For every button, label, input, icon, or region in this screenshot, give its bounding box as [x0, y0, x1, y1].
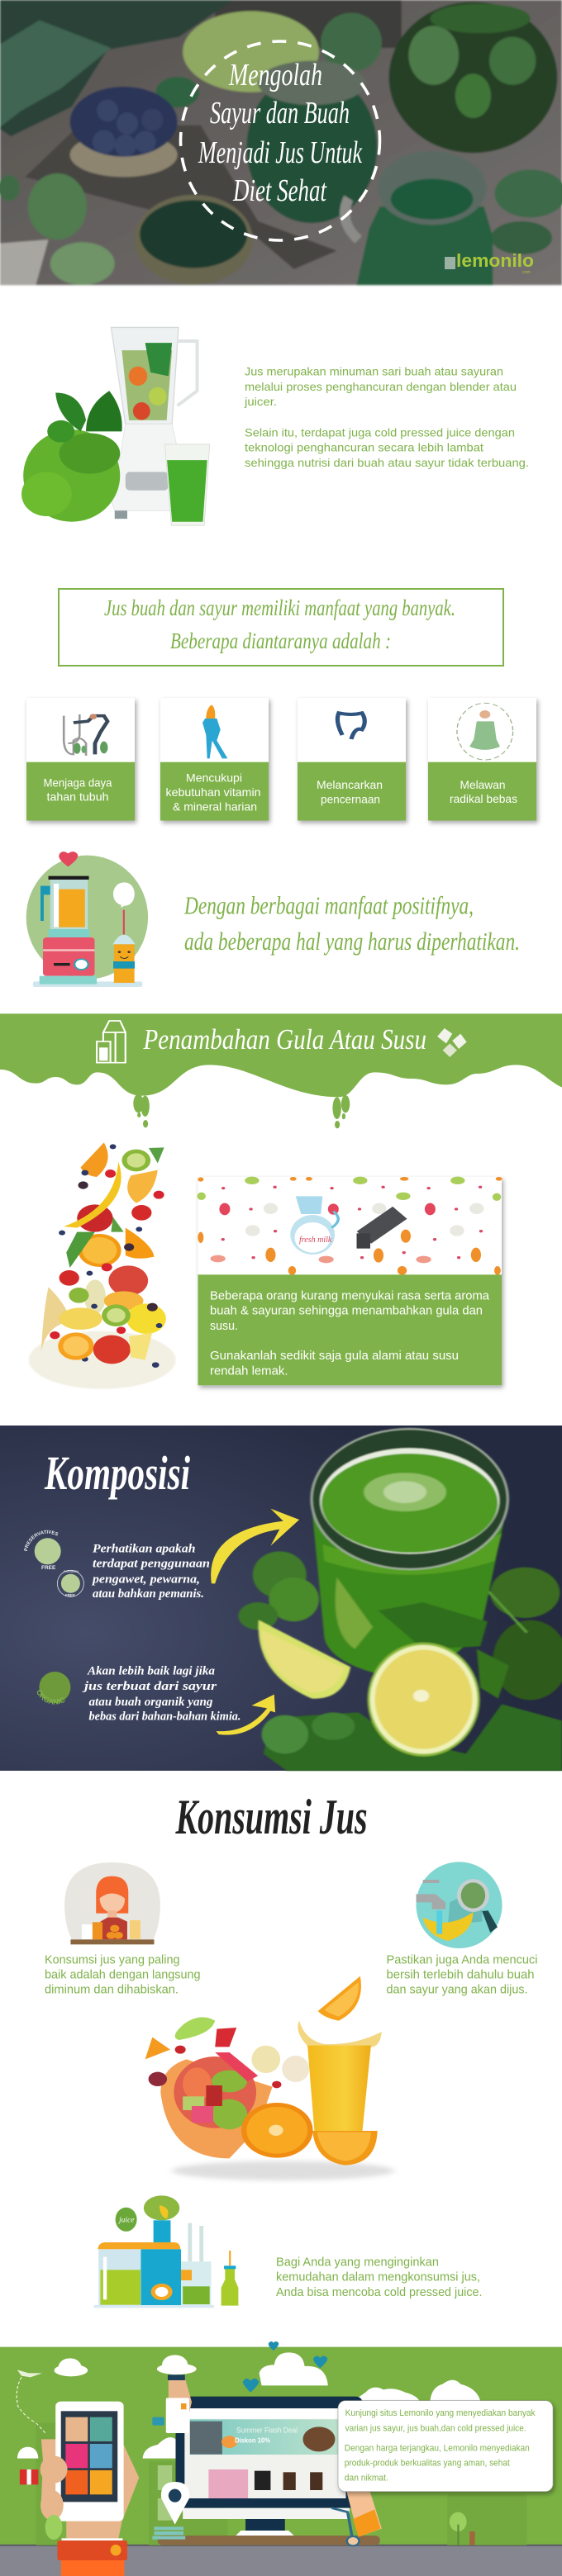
illustration: juice blender and cup	[26, 852, 148, 987]
logo: lemonilo: lemonilo	[456, 250, 534, 271]
icon: heart	[59, 852, 78, 866]
illustration: delivery box courier	[331, 2483, 382, 2545]
panel: benefit cards	[26, 698, 536, 821]
monitor promo text: Diskon 10%	[235, 2436, 270, 2444]
card: radikal bebas	[428, 698, 536, 821]
blender base	[111, 424, 179, 510]
illustration: juicer machine	[94, 2195, 238, 2308]
plane and parachute	[17, 2370, 46, 2484]
icon: fresh milk jug: fresh milk	[299, 1236, 332, 1245]
card: pencernaan: pencernaan	[321, 793, 380, 806]
text: organic: atau buah organik yang	[89, 1696, 213, 1709]
text: preservatives: terdapat penggunaan	[93, 1558, 210, 1571]
card: radikal bebas: Melawan	[460, 778, 506, 791]
note text	[183, 891, 520, 956]
illustration: hand with card	[152, 2364, 197, 2433]
text: wash first: bersih terlebih dahulu buah	[387, 1968, 534, 1981]
text: preservatives	[91, 1542, 210, 1601]
text: organic: Akan lebih baik lagi jika	[87, 1665, 215, 1678]
monitor	[158, 2397, 380, 2545]
icon: body silhouette	[202, 704, 227, 758]
hero photo	[0, 0, 562, 285]
badge: preservatives free: FREE	[41, 1565, 56, 1571]
icon: meditation	[457, 703, 513, 760]
text: organic: jus terbuat dari sayur	[83, 1680, 217, 1693]
scene background	[0, 2347, 562, 2576]
text: wash first: dan sayur yang akan dijus.	[387, 1983, 527, 1996]
monitor promo text: Summer Flash Deal	[236, 2427, 298, 2435]
card: daya tahan tubuh: Menjaga daya	[43, 776, 112, 790]
intro text: teknologi penghancuran secara lebih lambat	[245, 441, 483, 454]
icon: stethoscope and yoga	[64, 714, 108, 756]
note text: Gunakanlah sedikit saja gula alami atau susu	[210, 1350, 459, 1363]
logo: lemonilo	[445, 250, 534, 275]
hero title: Menjadi Jus Untuk	[198, 135, 363, 170]
heading: Komposisi	[44, 1446, 190, 1500]
callout: visit lemonilo: Kunjungi situs Lemonilo yang menyediakan banyak	[345, 2408, 536, 2418]
text: consume directly: Konsumsi jus yang paling	[45, 1953, 180, 1966]
icon: sugar pack	[357, 1207, 407, 1249]
note text	[210, 1289, 490, 1378]
arrow: to lime	[217, 1695, 275, 1735]
callout: visit lemonilo	[338, 2401, 553, 2492]
intro text: sehingga nutrisi dari buah atau sayur tidak terbuang.	[245, 456, 529, 469]
text: preservatives: pengawet, pewarna,	[91, 1573, 200, 1587]
drips	[133, 1094, 350, 1128]
photo: green juice glass with lime	[0, 1426, 562, 1771]
callout box: benefits heading: Beberapa diantaranya adalah :	[170, 629, 391, 653]
note text: susu.	[210, 1320, 238, 1333]
note text: rendah lemak.	[210, 1364, 288, 1378]
callout: visit lemonilo: dan nikmat.	[345, 2473, 388, 2483]
glass of green juice	[164, 444, 210, 525]
text: consume directly	[45, 1953, 201, 1996]
card: pencernaan: Melancarkan	[317, 778, 383, 791]
card: daya tahan tubuh	[26, 698, 135, 821]
callout box: benefits heading	[59, 589, 503, 666]
text: consume directly: diminum dan dihabiskan.	[45, 1983, 179, 1996]
heading: konsumsi jus: Konsumsi Jus	[175, 1790, 367, 1844]
text: preservatives: atau bahkan pemanis.	[93, 1587, 204, 1601]
illustration: hand with phone	[40, 2402, 139, 2576]
text: cold pressed: Anda bisa mencoba cold pressed juice.	[276, 2286, 483, 2299]
panel: online shop scene	[0, 2341, 562, 2576]
icon: juice bubble: juice	[117, 2217, 134, 2225]
fruit pattern	[198, 1177, 502, 1275]
text: organic	[83, 1665, 241, 1723]
badge: preservatives free: PRESERVATIVES	[24, 1530, 58, 1551]
note text: Beberapa orang kurang menyukai rasa serta aroma	[210, 1289, 490, 1302]
panel: hero banner	[0, 0, 562, 285]
badge: organic	[36, 1672, 71, 1705]
logo: lemonilo: .com	[522, 270, 531, 275]
icon: sugar cubes	[437, 1028, 467, 1057]
intro text: Jus merupakan minuman sari buah atau sayuran	[245, 365, 503, 378]
arrow: to glass	[211, 1509, 299, 1583]
lettuce	[23, 429, 120, 522]
text: cold pressed: Bagi Anda yang menginginkan	[276, 2256, 439, 2269]
illustration: fruit bowl and orange juice	[145, 1976, 394, 2180]
panel: sugar and milk note card	[198, 1177, 502, 1385]
icon: juice bubble	[116, 2208, 137, 2232]
clouds	[54, 2352, 480, 2459]
card: pencernaan	[298, 698, 406, 821]
icon: speech bubble	[113, 882, 135, 908]
badge: paraben free: FREE	[65, 1593, 75, 1597]
dashed circle	[180, 41, 380, 240]
intro text	[244, 365, 529, 469]
icons: hearts	[243, 2341, 327, 2393]
illustration: woman with juices	[64, 1862, 160, 1944]
card: vitamin dan mineral: kebutuhan vitamin	[165, 785, 261, 799]
callout: visit lemonilo: Dengan harga terjangkau, Lemonilo menyediakan	[345, 2443, 530, 2453]
badge: preservatives free	[24, 1530, 61, 1571]
intro text: melalui proses penghancuran dengan blender atau	[245, 380, 517, 393]
callout: visit lemonilo: produk-produk berkualitas yang aman, sehat	[345, 2459, 510, 2469]
text: wash first	[387, 1953, 537, 1996]
monitor promo text	[235, 2427, 298, 2444]
blender jar	[111, 327, 179, 424]
note text: buah & sayuran sehingga menambahkan gula dan	[210, 1305, 483, 1318]
text: organic: bebas dari bahan-bahan kimia.	[89, 1710, 241, 1723]
card: vitamin dan mineral: & mineral harian	[173, 800, 257, 814]
panel: composition	[0, 1426, 562, 1772]
intro text: Selain itu, terdapat juga cold pressed juice dengan	[245, 426, 515, 439]
card: vitamin dan mineral	[160, 698, 269, 821]
callout: visit lemonilo: varian jus sayur, jus buah,dan cold pressed juice.	[345, 2423, 526, 2433]
text: consume directly: baik adalah dengan langsung	[45, 1968, 201, 1981]
hero title: Mengolah	[228, 58, 322, 93]
badge: paraben free	[57, 1570, 83, 1597]
hero title: Diet Sehat	[232, 173, 327, 208]
hero title: Sayur dan Buah	[210, 96, 350, 130]
badge: paraben free: PARABEN	[64, 1570, 79, 1573]
heading: Penambahan Gula Atau Susu	[143, 1023, 426, 1056]
card: daya tahan tubuh: tahan tubuh	[46, 790, 109, 803]
intro text: juicer.	[244, 395, 277, 408]
dripping band	[0, 1013, 562, 1097]
callout box: benefits heading: Jus buah dan sayur memiliki manfaat yang banyak.	[104, 595, 455, 620]
illustration: blender with vegetables and juice	[21, 327, 210, 525]
text: wash first: Pastikan juga Anda mencuci	[387, 1953, 537, 1966]
card: vitamin dan mineral: Mencukupi	[186, 771, 242, 785]
illustration: falling fruits in milk	[29, 1142, 175, 1389]
text: cold pressed: kemudahan dalam mengkonsumsi jus,	[276, 2271, 480, 2284]
badge: organic: ORGANIC	[36, 1690, 64, 1705]
icon: milk carton and glass	[97, 1021, 126, 1063]
card: radikal bebas: radikal bebas	[450, 792, 517, 805]
icon: fresh milk jug	[290, 1196, 338, 1255]
hero title	[198, 58, 363, 208]
text: preservatives: Perhatikan apakah	[93, 1542, 195, 1555]
text: cold pressed	[276, 2256, 483, 2299]
icon: location pin	[45, 2482, 475, 2545]
panel: sugar and milk header	[0, 1013, 562, 1128]
icon: intestine	[337, 713, 364, 739]
illustration: washing fruit	[416, 1862, 502, 1948]
note text: Dengan berbagai manfaat positifnya,	[183, 891, 474, 920]
